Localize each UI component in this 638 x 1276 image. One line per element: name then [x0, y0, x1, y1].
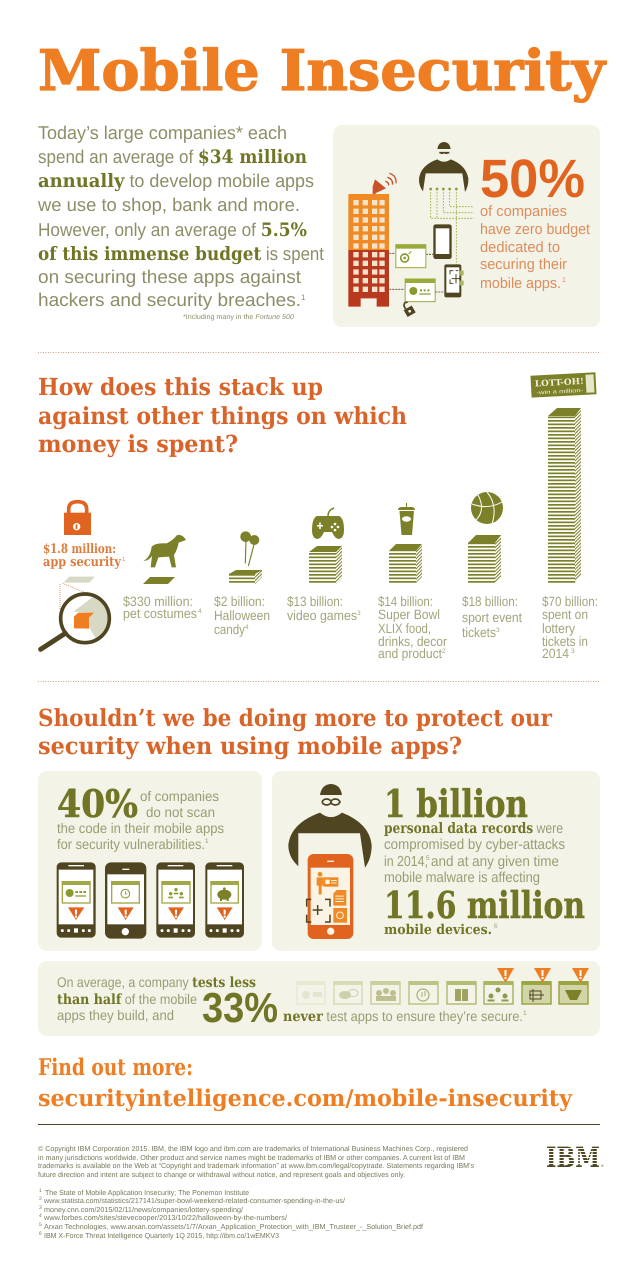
- footnotes: 3: [39, 1205, 42, 1211]
- 40% caption: for security vulnerabilities.: [57, 836, 205, 852]
- footnotes: money.cnn.com/2015/02/11/news/companies/lottery-spending/: [44, 1205, 243, 1214]
- comparison: $14 billion Super Bowl: and product: [378, 646, 442, 661]
- 50% caption: dedicated to: [480, 239, 560, 256]
- intro text block: 1: [301, 293, 306, 302]
- comparison: $14 billion Super Bowl: Super Bowl: [378, 607, 440, 622]
- comparison: $330 million pet costumes: pet costumes: [123, 606, 197, 621]
- icon: basketball: [471, 492, 503, 524]
- testing text: On average, a company tests less: [57, 974, 256, 991]
- copyright text: © Copyright IBM Corporation 2015. IBM, the IBM logo and ibm.com are trademarks of International Business Machines Corp., registered: [38, 1144, 468, 1153]
- heading: how does this stack up: How does this stack up: [38, 373, 323, 401]
- heading: how does this stack up: money is spent?: [38, 430, 238, 458]
- comparison: $13 billion video games: $13 billion:: [287, 594, 343, 609]
- illustration: building, hacker and apps: [348, 142, 474, 317]
- title: Mobile Insecurity: [38, 38, 606, 104]
- 40% caption: the code in their mobile apps: [57, 820, 224, 836]
- comparison: $13 billion video games: 3: [357, 610, 361, 617]
- heading: shouldn't we be doing more: Shouldn’t we be doing more to protect our: [38, 704, 553, 732]
- footnotes: www.statista.com/statistics/217141/super-bowl-weekend-related-consumer-spending-in-the-us/: [43, 1196, 345, 1205]
- heading: how does this stack up: [38, 373, 407, 458]
- comparison: $2 billion Halloween candy: candy: [214, 622, 245, 637]
- icons: four phones with warnings: [57, 862, 244, 939]
- icon: lottery ticket: LOTT-OH!: [535, 377, 584, 389]
- icon: drink cup: [398, 503, 415, 535]
- comparison: $18 billion sport event tickets: $18 billion:: [462, 594, 518, 609]
- footnotes: 6: [39, 1231, 42, 1237]
- comparison: $70 billion lottery tickets: [530, 372, 598, 661]
- comparison: $70 billion lottery tickets: 3: [571, 648, 575, 655]
- 40% caption: of companies: [140, 788, 219, 804]
- heading: shouldn't we be doing more: [38, 704, 553, 760]
- panel: 50% of companies: [333, 125, 600, 327]
- comparison: $2 billion Halloween candy: 4: [245, 624, 249, 631]
- mobile devices caption: 6: [494, 923, 498, 930]
- never test text: never test apps to ensure they’re secure.: [283, 1008, 523, 1025]
- 1 billion caption: compromised by cyber-attacks: [384, 837, 565, 853]
- footnotes: The State of Mobile Application Insecurity; The Ponemon Institute: [45, 1188, 249, 1197]
- footnotes: 1: [39, 1188, 42, 1194]
- intro text block: [37, 122, 324, 321]
- 1 billion caption: and at any given time: [431, 854, 559, 870]
- footnotes: [39, 1188, 423, 1240]
- 1 billion caption: mobile malware is affecting: [384, 870, 540, 886]
- 50% caption: have zero budget: [480, 221, 591, 238]
- panel: 33% never test: [38, 961, 600, 1036]
- 1 billion caption: in 2014,: [384, 854, 428, 870]
- comparison: $2 billion Halloween candy: [214, 531, 270, 637]
- panel: 1 billion records: [272, 771, 600, 951]
- icon: magnifying glass over a bill: [41, 577, 109, 649]
- 50% figure: 50%: [480, 149, 585, 209]
- intro text block: Today’s large companies* each: [38, 122, 287, 143]
- icon: hacker with orange phone: [288, 784, 372, 939]
- comparison: $330 million pet costumes: $330 million:: [123, 594, 193, 609]
- footnotes: IBM X-Force Threat Intelligence Quarterly 1Q 2015, http://ibm.co/1wEMKV3: [44, 1231, 279, 1240]
- footnotes: Arxan Technologies, www.arxan.com/assets/1/7/Arxan_Application_Protection_with_IBM_Trusteer_-_Solution_Brief.pdf: [44, 1222, 423, 1231]
- 50% caption: of companies: [480, 203, 567, 220]
- IBM logo: IBM: [546, 1141, 600, 1174]
- icon: dog: [143, 535, 186, 567]
- icons: eight app windows: [297, 981, 588, 1004]
- intro text block: *Including many in the Fortune 500: [183, 313, 294, 321]
- icon: game controller: [312, 508, 344, 539]
- comparison: $18 billion sport event tickets: tickets: [462, 625, 496, 640]
- 40% figure: 40%: [57, 781, 138, 826]
- 50% caption: [480, 203, 591, 292]
- comparison: $1.8 million app security: $1.8 million:: [43, 542, 116, 557]
- 50% caption: 1: [562, 277, 566, 284]
- find out more: securityintelligence.com/mobile-insecurity: [38, 1085, 573, 1112]
- intro text block: hackers and security breaches.: [38, 289, 301, 310]
- comparison: $70 billion lottery tickets: 2014: [542, 646, 569, 661]
- footnotes: www.forbes.com/sites/stevecooper/2013/10/22/halloween-by-the-numbers/: [43, 1213, 287, 1222]
- footnotes: 5: [39, 1222, 42, 1228]
- comparison: $14 billion Super Bowl: [378, 503, 447, 661]
- 1 billion figure: 1 billion: [384, 781, 528, 826]
- 40% caption: [57, 788, 224, 852]
- comparison: $70 billion lottery tickets: lottery: [542, 621, 575, 636]
- heading: shouldn't we be doing more: security when using mobile apps?: [38, 732, 462, 760]
- icon: padlock: [64, 502, 91, 535]
- comparison: $1.8 million app security: 1: [122, 556, 126, 563]
- comparison: $2 billion Halloween candy: Halloween: [214, 608, 270, 623]
- testing text: [57, 974, 256, 1023]
- footnotes: 4: [39, 1213, 42, 1219]
- 1 billion caption: 5: [426, 855, 430, 862]
- intro text block: on securing these apps against: [38, 266, 301, 287]
- 1 billion caption: [384, 820, 565, 886]
- icons: three warning triangles: [497, 968, 589, 983]
- icon: lottery ticket: [530, 372, 597, 398]
- intro text block: annually to develop mobile apps: [38, 170, 314, 192]
- comparison: $14 billion Super Bowl: drinks, decor: [378, 634, 447, 649]
- 50% caption: securing their: [480, 256, 567, 273]
- comparison: $14 billion Super Bowl: XLIX food,: [378, 621, 431, 636]
- icon: lollipops: [240, 531, 259, 566]
- comparison: $18 billion sport event tickets: sport event: [462, 610, 522, 625]
- comparison: $330 million pet costumes: [123, 535, 202, 621]
- comparison: $1.8 million app security: [41, 502, 126, 649]
- comparison: $330 million pet costumes: 4: [198, 608, 202, 615]
- comparison: $70 billion lottery tickets: tickets in: [542, 634, 588, 649]
- footnotes: 2: [39, 1196, 42, 1202]
- comparison: $14 billion Super Bowl: $14 billion:: [378, 594, 433, 609]
- comparison: $13 billion video games: [287, 508, 361, 623]
- IBM logo: ®: [601, 1164, 604, 1168]
- 50% caption: mobile apps.: [480, 275, 561, 292]
- comparison: $13 billion video games: video games: [287, 608, 357, 623]
- 11.6 million figure: 11.6 million: [384, 883, 585, 927]
- testing text: than half of the mobile: [57, 991, 197, 1008]
- comparison: $18 billion sport event tickets: 3: [496, 627, 500, 634]
- find out more: Find out more:: [38, 1054, 193, 1081]
- panel: 40% of companies: [38, 771, 262, 951]
- comparison: $18 billion sport event tickets: [462, 492, 522, 640]
- comparison: $14 billion Super Bowl: 2: [442, 648, 446, 655]
- 1 billion caption: personal data records were: [384, 820, 563, 837]
- icon: lottery ticket: -win a million-: [536, 388, 584, 396]
- testing text: apps they build, and: [57, 1007, 174, 1023]
- copyright text: in many jurisdictions worldwide. Other product and service names might be trademarks of IBM or other companies. A current list of IBM: [38, 1153, 465, 1162]
- comparison: $70 billion lottery tickets: $70 billion:: [542, 594, 598, 609]
- intro text block: spend an average of $34 million: [38, 146, 307, 168]
- comparison: $2 billion Halloween candy: $2 billion:: [214, 594, 265, 609]
- intro text block: we use to shop, bank and more.: [37, 194, 300, 215]
- 33% figure: 33%: [202, 984, 278, 1031]
- 40% caption: do not scan: [146, 804, 215, 820]
- intro text block: of this immense budget is spent: [38, 243, 324, 265]
- copyright text: [38, 1144, 474, 1179]
- copyright text: trademarks is available on the Web at “Copyright and trademark information” at www.ibm.com/legal/copytrade. Statements regarding IBM’s: [38, 1161, 474, 1170]
- heading: how does this stack up: against other things on which: [38, 402, 407, 430]
- never test text: 1: [523, 1010, 527, 1017]
- find out more: [38, 1054, 573, 1112]
- 40% caption: 1: [205, 838, 209, 845]
- comparison: $70 billion lottery tickets: spent on: [542, 607, 588, 622]
- intro text block: However, only an average of 5.5%: [38, 219, 307, 241]
- mobile devices caption: mobile devices.: [384, 922, 492, 938]
- comparison: $1.8 million app security: app security: [43, 555, 121, 570]
- copyright text: future direction and intent are subject to change or withdrawal without notice, and represent goals and objectives only.: [38, 1170, 405, 1179]
